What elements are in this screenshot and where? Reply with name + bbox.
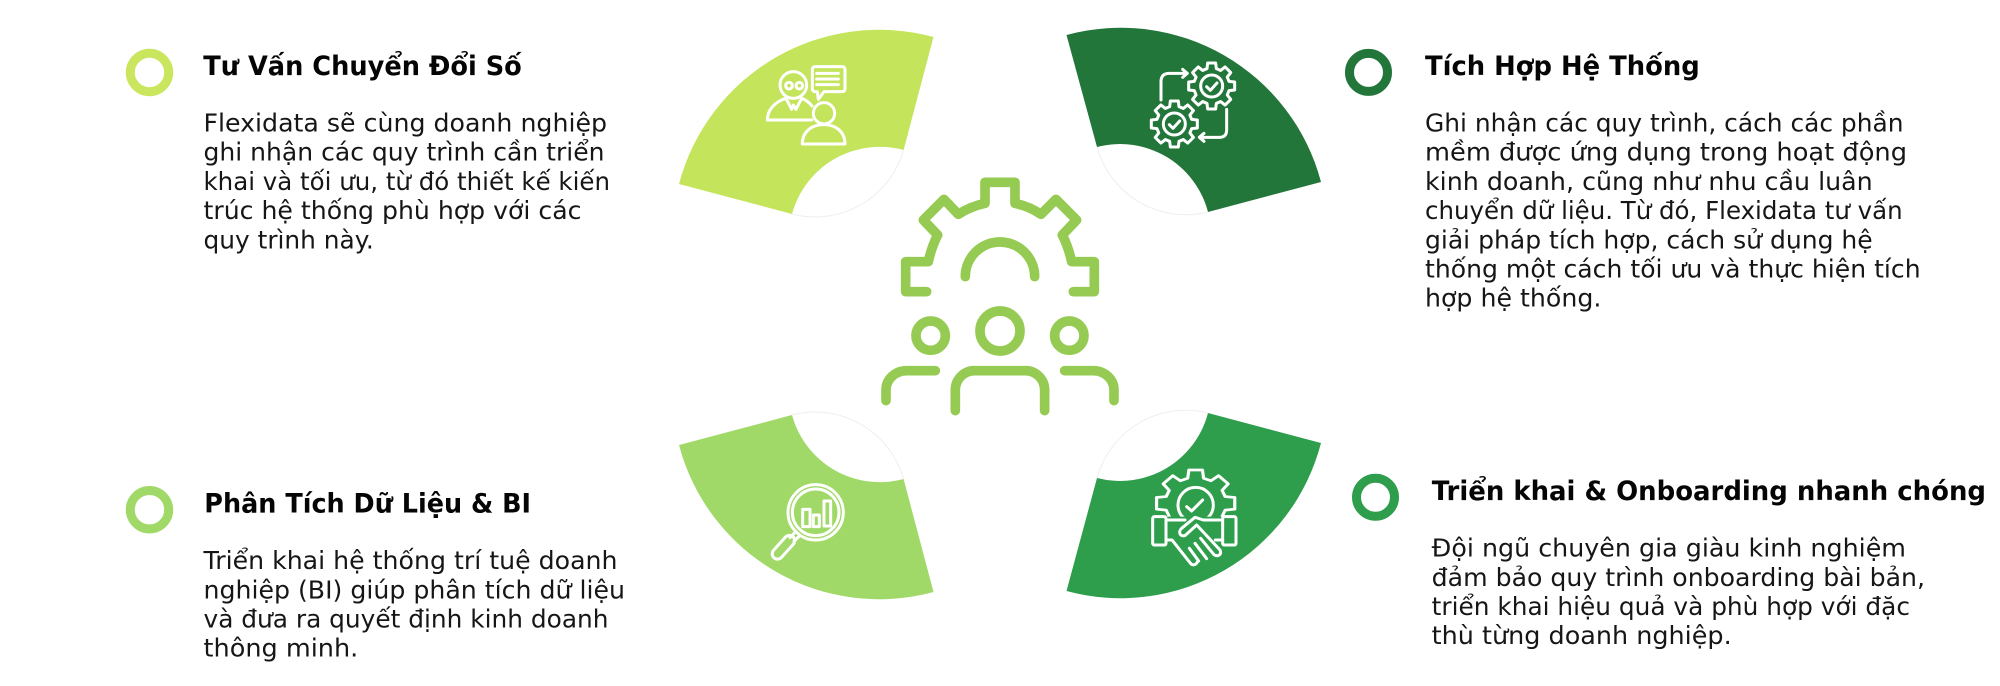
body text: thông minh. [204,634,358,663]
body text: giải pháp tích hợp, cách sử dụng hệ [1425,225,1873,254]
body text: ghi nhận các quy trình cần triển [204,138,604,167]
marker ring [130,490,169,529]
body text: nghiệp (BI) giúp phân tích dữ liệu [204,575,625,604]
body text: khai và tối ưu, từ đó thiết kế kiến [204,167,610,196]
panel: onboarding sector [1066,410,1321,598]
body text: chuyển dữ liệu. Từ đó, Flexidata tư vấn [1425,196,1903,225]
body text [204,109,610,254]
body text: thù từng doanh nghiệp. [1432,621,1732,650]
panel: integration sector [1066,28,1321,215]
body text: kinh doanh, cũng như nhu cầu luân [1425,167,1873,196]
icon: handshake and gear [1153,470,1236,565]
marker ring [1350,53,1388,91]
body text: triển khai hiệu quả và phù hợp với đặc [1432,592,1910,621]
heading: Tư Vấn Chuyển Đổi Số [203,49,522,82]
body text: Triển khai hệ thống trí tuệ doanh [202,546,618,575]
heading: Triển khai & Onboarding nhanh chóng [1432,474,1986,507]
icon: gears with arrows [1151,63,1235,147]
panel: consulting sector [679,30,934,217]
body text: hợp hệ thống. [1425,284,1601,313]
body text: trúc hệ thống phù hợp với các [204,196,582,225]
block: analytics text [130,488,625,663]
block: integration text [1350,51,1921,313]
marker ring [130,53,169,92]
block: onboarding text [1356,474,1986,650]
body text: quy trình này. [204,225,374,254]
body text: Ghi nhận các quy trình, cách các phần [1425,109,1904,138]
body text: thống một cách tối ưu và thực hiện tích [1425,254,1921,283]
heading: Tích Hợp Hệ Thống [1425,51,1700,82]
marker ring [1356,478,1394,516]
body text: Đội ngũ chuyên gia giàu kinh nghiệm [1432,534,1906,563]
body text: đảm bảo quy trình onboarding bài bản, [1432,563,1925,592]
body text: mềm được ứng dụng trong hoạt động [1425,138,1907,167]
body text: Flexidata sẽ cùng doanh nghiệp [204,109,607,138]
center icon: gear and team [886,182,1114,411]
icon: two people talking [767,67,845,144]
body text: và đưa ra quyết định kinh doanh [204,604,608,633]
heading: Phân Tích Dữ Liệu & BI [204,488,531,519]
icon: magnifier with bars [770,485,843,561]
body text [1432,534,1925,650]
body text [202,546,625,663]
body text [1425,109,1921,313]
panel: analytics sector [679,412,934,599]
block: consulting text [130,49,610,254]
